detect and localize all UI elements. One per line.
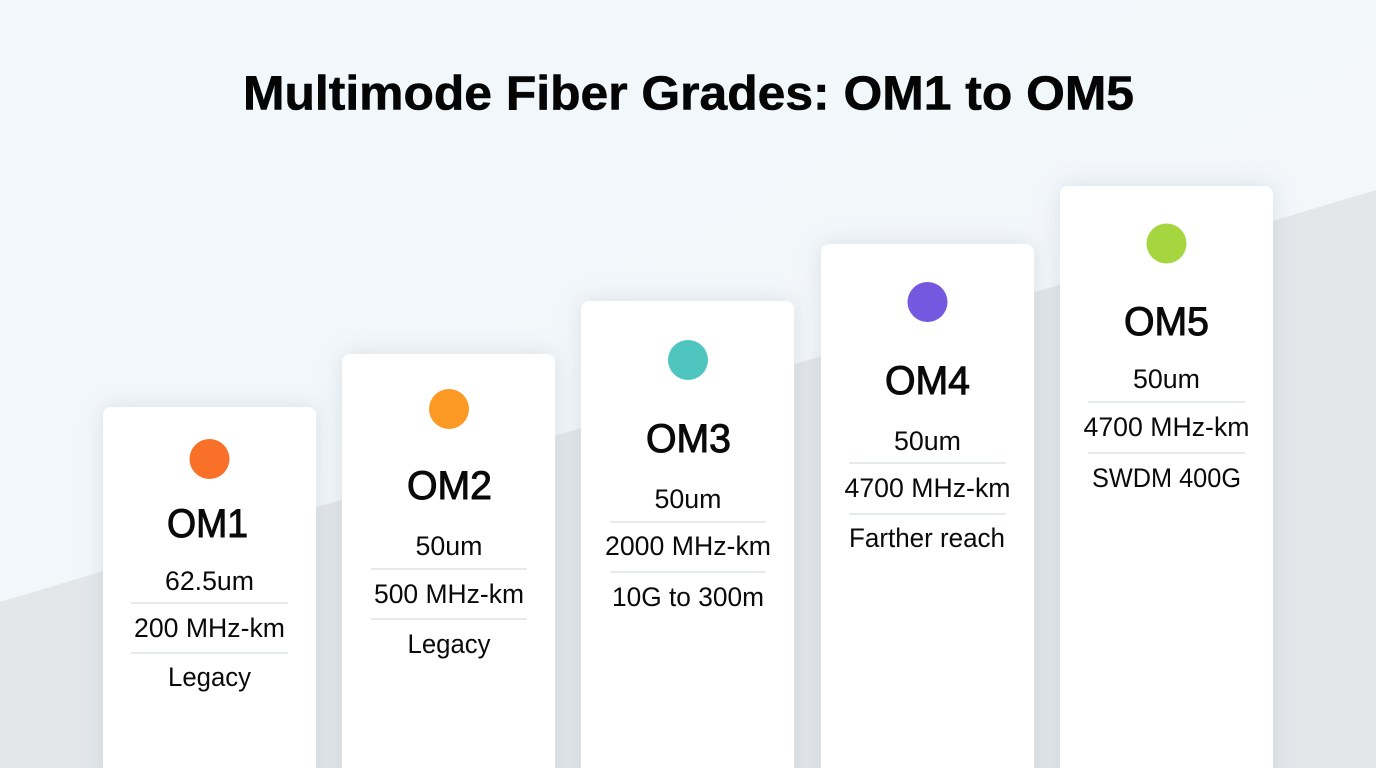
panel: OM3 (581, 301, 794, 768)
core size: 50um (416, 531, 482, 561)
panel: OM1 (103, 407, 316, 768)
use note: SWDM 400G (1092, 463, 1241, 493)
icon: orange dot (190, 439, 230, 479)
icon: teal dot (668, 340, 708, 380)
title: Multimode Fiber Grades: OM1 to OM5 (243, 68, 1134, 120)
icon: lime dot (1146, 224, 1186, 264)
panel: OM2 (342, 354, 555, 768)
icon: purple dot (908, 282, 948, 322)
panel: OM5 (1060, 186, 1273, 768)
use note: 10G to 300m (612, 582, 764, 612)
bandwidth: 200 MHz-km (134, 613, 285, 643)
use note: Legacy (168, 662, 251, 692)
panel: OM4 (821, 244, 1034, 768)
core size: 50um (894, 426, 961, 456)
core size: 50um (1133, 364, 1200, 394)
heading: OM3: OM3 (646, 417, 731, 461)
bandwidth: 500 MHz-km (374, 579, 524, 609)
use note: Farther reach (849, 523, 1005, 553)
bandwidth: 4700 MHz-km (1084, 412, 1250, 442)
bandwidth: 4700 MHz-km (844, 473, 1010, 503)
heading: OM2: OM2 (407, 464, 492, 508)
icon: amber dot (429, 389, 469, 429)
core size: 62.5um (165, 566, 254, 596)
heading: OM1: OM1 (167, 502, 248, 546)
use note: Legacy (408, 629, 491, 659)
bandwidth: 2000 MHz-km (605, 531, 771, 561)
heading: OM5: OM5 (1124, 300, 1209, 344)
heading: OM4: OM4 (885, 359, 970, 403)
core size: 50um (654, 484, 722, 514)
